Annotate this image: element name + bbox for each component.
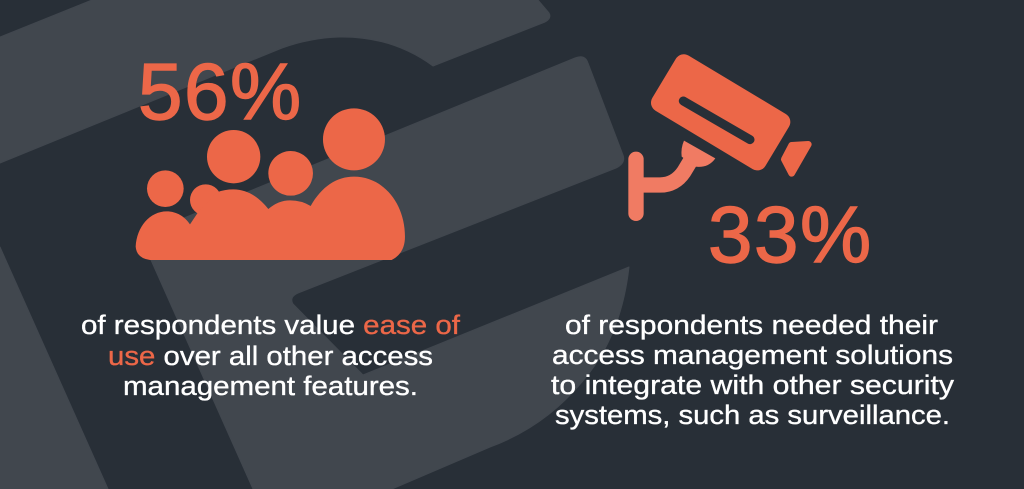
description: integration: access management solutions [552,340,953,370]
description: integration: of respondents needed their [565,310,938,340]
statistic: 56%: 56% [138,47,301,136]
description: ease of use [81,310,461,401]
icon: group of people [136,108,405,260]
description: integration: systems, such as surveillance. [555,400,950,430]
camera body [648,51,794,174]
camera mount [636,141,715,213]
icon: surveillance camera [636,51,808,213]
statistic: 33%: 33% [708,190,871,279]
description: ease of use: management features. [123,371,418,401]
camera lens [784,144,808,173]
background logo watermark [0,0,629,489]
description: integration: to integrate with other security [551,370,955,400]
camera slit [683,101,750,140]
description: ease of use: of respondents value ease of [81,310,461,340]
description: ease of use: use over all other access [108,341,433,371]
description: integration [551,310,955,430]
